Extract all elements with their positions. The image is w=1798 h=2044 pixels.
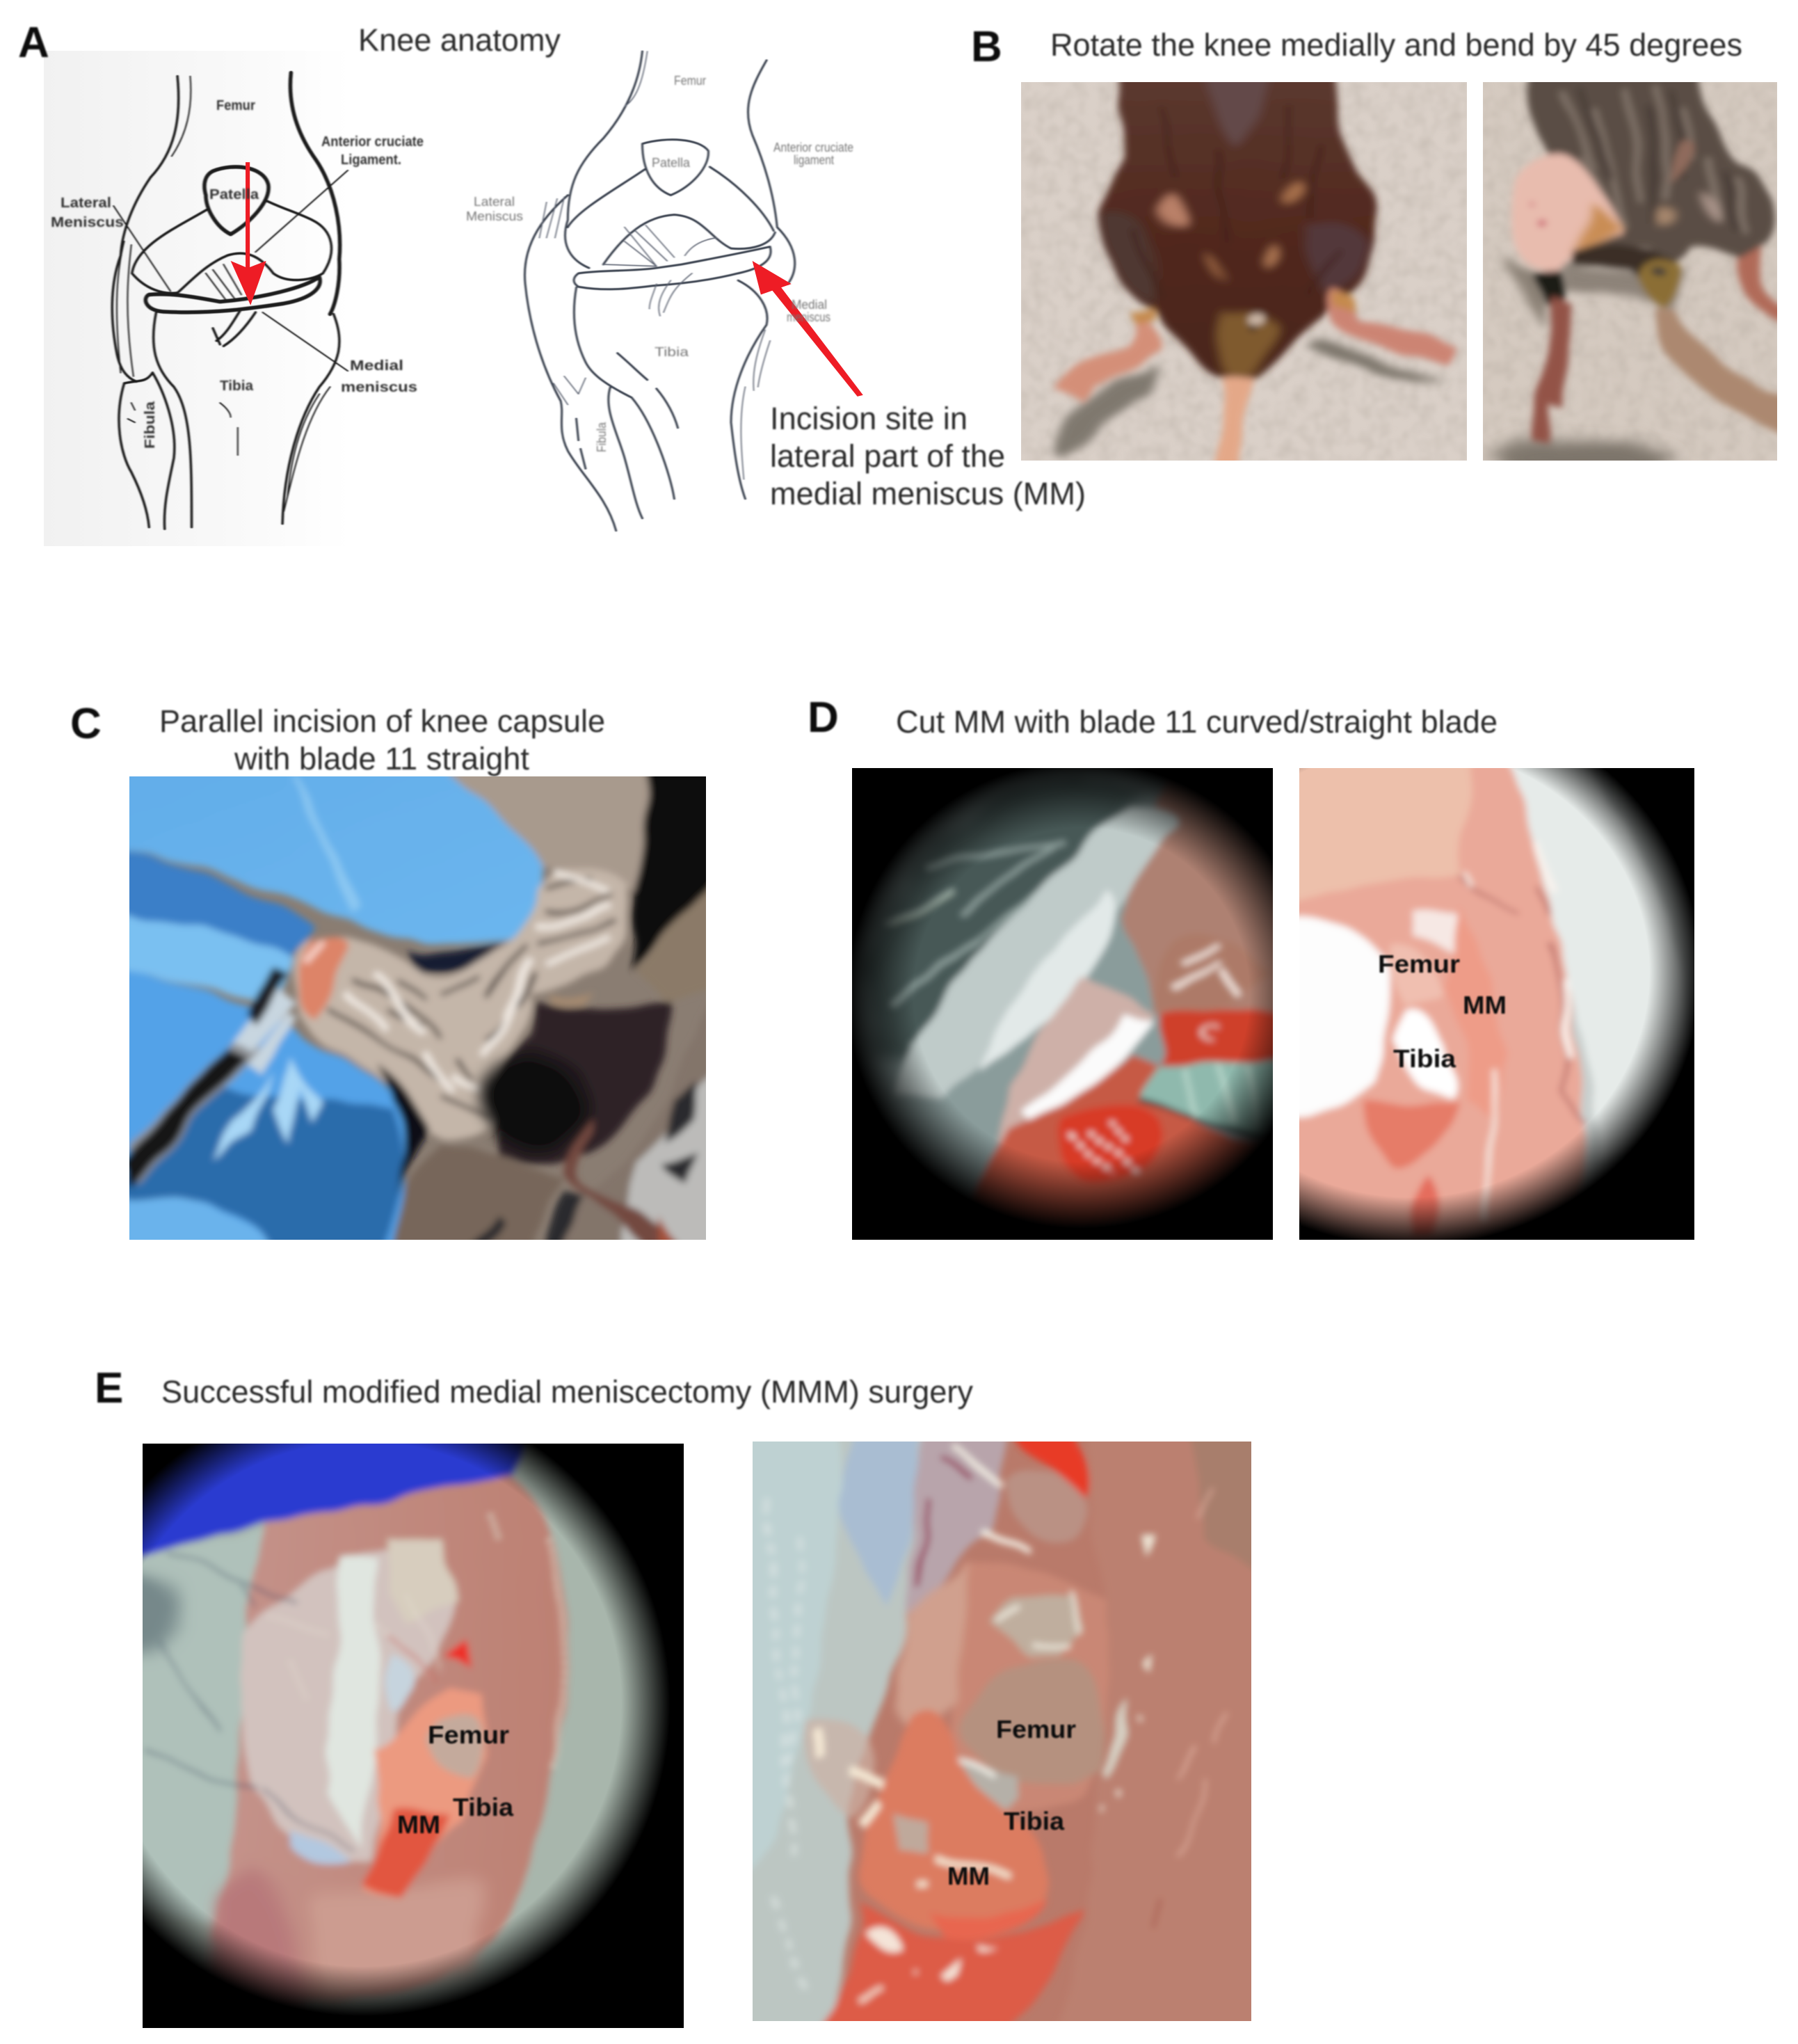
panel letter B: B	[971, 23, 1002, 71]
photo: gloved fingers and knee	[117, 764, 721, 1252]
panel letter E: E	[95, 1364, 123, 1412]
callout: incision site: lateral part of the	[770, 438, 1005, 474]
red arrow: into joint from above	[231, 162, 266, 305]
heading E: Successful modified medial meniscectomy (MMM) surgery	[161, 1374, 973, 1410]
anatomy labels, front view: Medial	[350, 358, 403, 374]
heading D: Cut MM with blade 11 curved/straight blade	[896, 704, 1498, 740]
panel letter A: A	[18, 19, 49, 67]
anatomy labels, oblique view: Fibula	[595, 422, 609, 452]
anatomy labels, oblique view: Tibia	[655, 345, 689, 359]
heading B: Rotate the knee medially and bend by 45 degrees	[1050, 27, 1742, 63]
anatomy labels, front view: Meniscus	[51, 215, 124, 230]
red arrow: incision site	[753, 261, 863, 397]
anatomy labels, oblique view: ligament	[794, 153, 834, 167]
anatomy labels, oblique view: Medial	[792, 298, 827, 312]
anatomy labels, front view: Fibula	[143, 401, 158, 449]
label: Femur, MM and Tibia: Tibia	[1393, 1044, 1456, 1073]
photo: finished surgery, wide view	[143, 1444, 684, 2028]
label: Femur, Tibia and MM	[397, 1720, 514, 1839]
label: Femur, Tibia and MM: MM	[397, 1810, 440, 1839]
anatomy labels, front view: meniscus	[341, 380, 417, 395]
callout: incision site: medial meniscus (MM)	[770, 476, 1086, 511]
anatomy labels, oblique view: Lateral	[474, 195, 515, 209]
drawing background	[44, 51, 350, 546]
anatomy labels, front view	[51, 98, 424, 449]
photo: microscope view with blade	[852, 768, 1273, 1240]
anatomy labels, front view: Tibia	[220, 378, 254, 394]
label: Femur, Tibia and MM: Tibia	[453, 1793, 514, 1821]
label: Femur, Tibia and MM	[947, 1715, 1076, 1890]
label: Femur, MM and Tibia	[1378, 950, 1507, 1073]
photo: microscope view labelled	[1299, 768, 1694, 1240]
heading C: with blade 11 straight	[234, 741, 529, 776]
label: Femur, Tibia and MM: MM	[947, 1862, 990, 1890]
panel A: knee anatomy	[18, 19, 1086, 546]
panel E: successful surgery	[44, 1364, 1270, 2044]
diagram: front view of knee	[112, 73, 348, 529]
anatomy labels, oblique view: Femur	[674, 74, 706, 88]
anatomy labels, front view: Anterior cruciate	[321, 134, 424, 150]
anatomy labels, oblique view: Meniscus	[466, 209, 523, 223]
label: Femur, Tibia and MM: Femur	[428, 1720, 509, 1749]
anatomy labels, oblique view	[466, 74, 853, 452]
label: Femur, MM and Tibia: MM	[1463, 991, 1507, 1019]
callout: incision site: Incision site in	[770, 401, 968, 436]
anatomy labels, oblique view: Patella	[652, 156, 691, 170]
anatomy labels, front view: Ligament.	[341, 152, 401, 168]
photo: mouse dorsal view	[1021, 71, 1467, 468]
diagram: flexed oblique view of knee	[524, 51, 795, 531]
panel B: knee rotation	[971, 23, 1794, 477]
panel letter D: D	[808, 694, 839, 742]
label: Femur, MM and Tibia: Femur	[1378, 950, 1460, 978]
photo: mouse with shaved knee	[1483, 82, 1777, 461]
anatomy labels, front view: Lateral	[61, 195, 111, 211]
heading: knee anatomy: Knee anatomy	[358, 22, 561, 58]
label: Femur, Tibia and MM: Femur	[996, 1715, 1076, 1743]
anatomy labels, oblique view: meniscus	[787, 310, 830, 324]
heading C	[159, 703, 605, 776]
panel C: capsule incision	[70, 700, 721, 1252]
callout: incision site	[770, 401, 1086, 511]
photo: finished surgery, close-up	[753, 1442, 1251, 2021]
label: Femur, Tibia and MM: Tibia	[1004, 1807, 1065, 1835]
panel D: meniscus cut	[808, 694, 1710, 1248]
panel letter C: C	[70, 700, 102, 748]
heading C: Parallel incision of knee capsule	[159, 703, 605, 739]
anatomy labels, oblique view: Anterior cruciate	[773, 141, 853, 154]
anatomy labels, front view: Patella	[209, 187, 259, 202]
anatomy labels, front view: Femur	[216, 98, 255, 113]
